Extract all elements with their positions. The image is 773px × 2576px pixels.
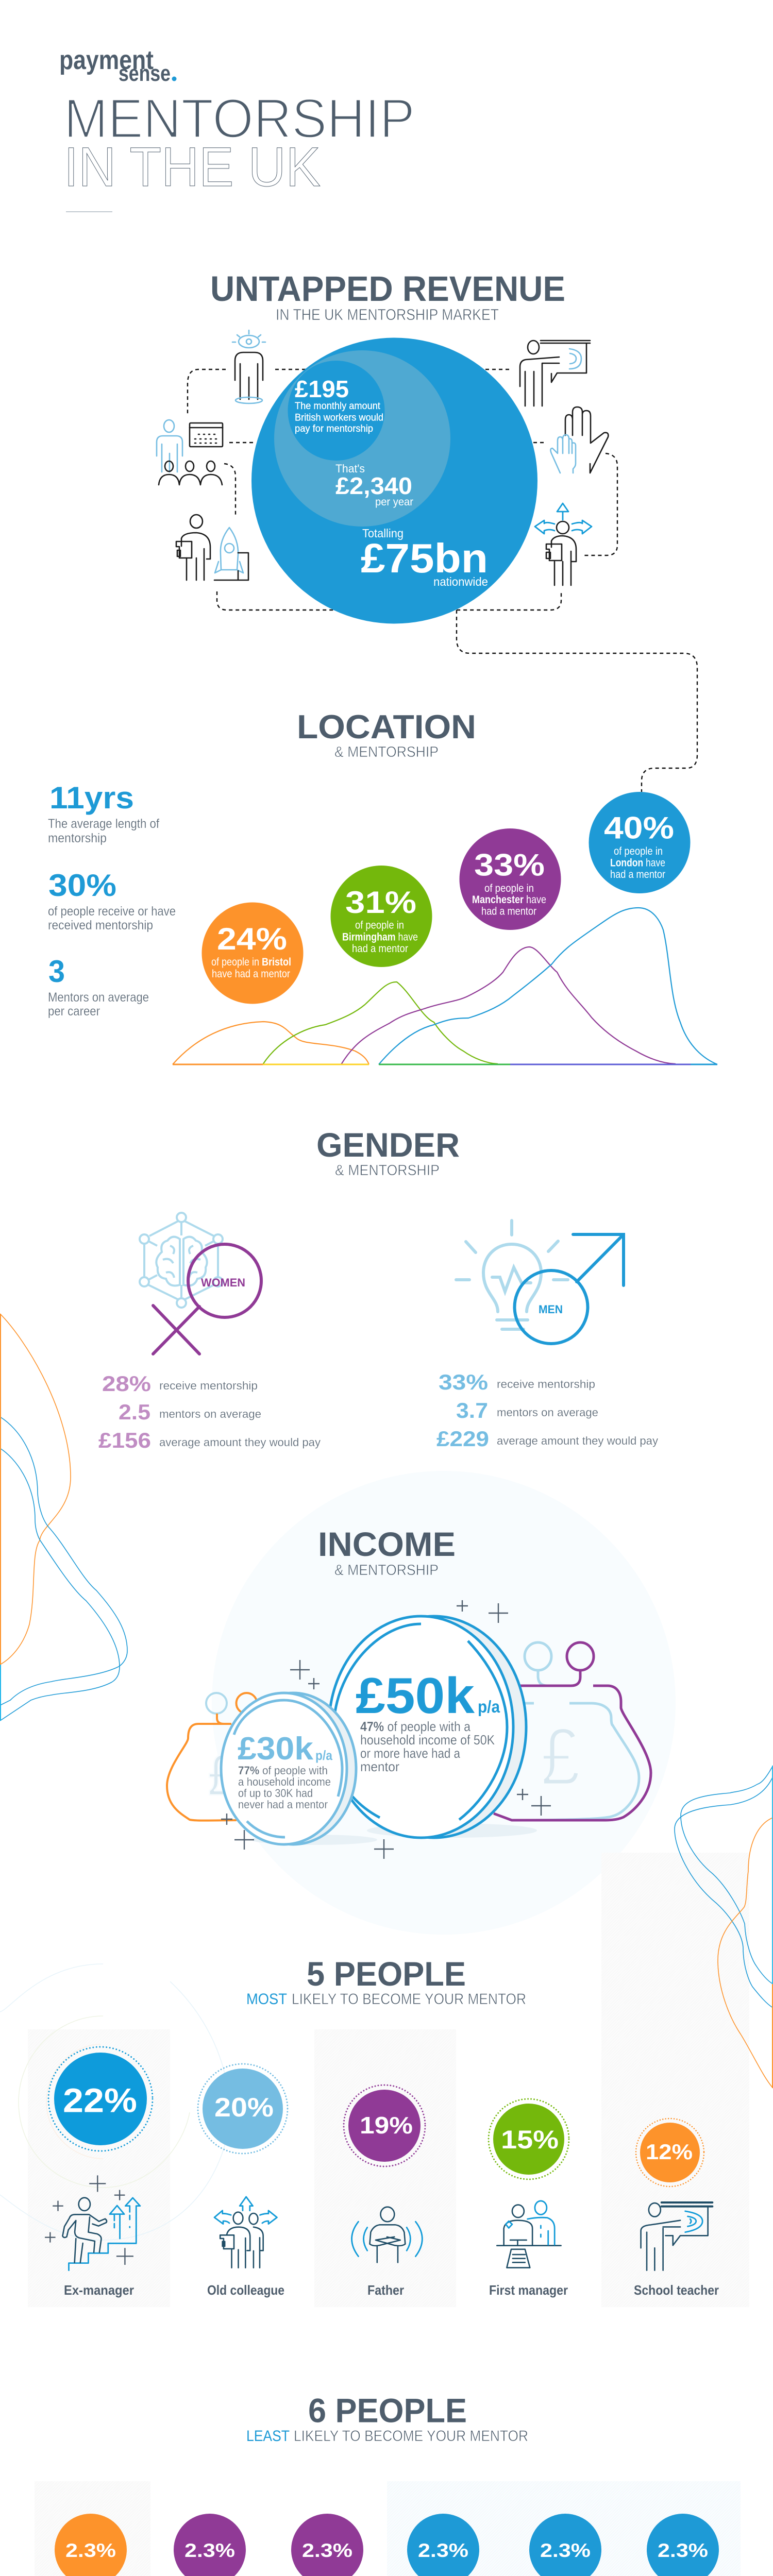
coin: £30k: a household income [238, 1775, 331, 1788]
bubble row: 2.3% [55, 2514, 719, 2576]
stat labels: men: mentors on average [497, 1406, 598, 1419]
heading: 6 people: 6 PEOPLE [308, 2392, 467, 2430]
stat: 11yrs: The average length of [48, 817, 159, 831]
£75bn text: nationwide [433, 575, 488, 588]
icon: old colleague [214, 2197, 277, 2268]
£195 text [295, 376, 383, 434]
bubble: manchester [460, 828, 561, 930]
bubble: manchester: 33% [474, 848, 545, 882]
title: IN THE UK [64, 135, 321, 198]
stat: 11yrs: mentorship [48, 831, 107, 845]
bubble: bristol [202, 903, 303, 1004]
label row: 5 people: Ex-manager [64, 2282, 134, 2298]
icon: first manager [497, 2201, 561, 2268]
heading: location: & MENTORSHIP [334, 744, 439, 760]
label row: 5 people: First manager [489, 2282, 568, 2298]
label: women: WOMEN [201, 1276, 245, 1289]
icon: father with arms crossed [352, 2207, 422, 2262]
heading: untapped revenue [210, 269, 565, 324]
heading: location: LOCATION [297, 708, 476, 745]
bubble row: 2.3%: 2.3% [65, 2540, 116, 2561]
£2,340 text: per year [375, 496, 413, 508]
stat: 30%: 30% [48, 868, 116, 903]
label row: 5 people: Father [367, 2282, 404, 2298]
icon: person with rocket [176, 515, 248, 580]
stat: 11yrs: 11yrs [49, 781, 134, 815]
sparkles: income [221, 1600, 551, 1859]
background: income circle [212, 1471, 676, 1935]
heading: income: INCOME [318, 1525, 456, 1563]
stat labels: men: receive mentorship [497, 1378, 595, 1391]
illustration: purple purse [494, 1642, 651, 1820]
bubble: 19%: 19% [360, 2112, 413, 2139]
heading: 5 people: LIKELY TO BECOME YOUR MENTOR [292, 1991, 526, 2008]
stat labels: women: average amount they would pay [159, 1436, 321, 1449]
coin: £30k: of up to 30K had [238, 1787, 313, 1800]
chart: location curves [173, 908, 717, 1064]
background panel: ex-manager column [28, 2029, 170, 2307]
coin: £50k: 47% of people with a [360, 1719, 470, 1734]
title: MENTORSHIP [64, 87, 415, 149]
bubble: manchester: had a mentor [481, 906, 536, 917]
icon: person with calendar and group [157, 420, 223, 485]
stat: 3 mentors: Mentors on average [48, 990, 149, 1005]
bubble row: 2.3%: 2.3% [540, 2540, 591, 2561]
heading: 5 people [246, 1955, 526, 2008]
£195 text: The monthly amount [295, 401, 381, 412]
coin: £50k: household income of 50K [360, 1732, 495, 1748]
label row: 5 people [64, 2282, 719, 2298]
bubble: 15%: 15% [501, 2125, 559, 2154]
background panel: stepmother to coach [387, 2481, 741, 2576]
£195 text: £195 [295, 376, 349, 402]
£75bn text: £75bn [361, 535, 488, 581]
bubble: 22%: 22% [63, 2081, 137, 2120]
bubble: manchester: Manchester have [472, 894, 546, 906]
stat labels: men [497, 1378, 658, 1447]
label row: 5 people: Old colleague [207, 2282, 284, 2298]
stats: men: £229 [436, 1427, 489, 1451]
bubble: 12% [636, 2119, 704, 2187]
bubble row: 2.3%: 2.3% [418, 2540, 468, 2561]
dashed connectors [188, 369, 697, 792]
stat: 3 mentors [48, 954, 149, 1019]
illustration: orange purse: £ [208, 1743, 236, 1807]
icon: eye person [232, 330, 265, 403]
stats: women [98, 1371, 151, 1452]
heading: 5 people: MOST [246, 1991, 287, 2008]
bubble: 12%: 12% [646, 2140, 693, 2164]
icon: light bulb [456, 1221, 568, 1329]
bubble: london: 40% [604, 811, 674, 845]
bubble: birmingham: had a mentor [352, 943, 408, 955]
stat: 30% [48, 868, 176, 933]
bubble: bristol: of people in Bristol [211, 956, 291, 968]
icon: venus symbol [153, 1244, 261, 1354]
bubble row: 2.3%: 2.3% [658, 2540, 708, 2561]
icon: raised hands [550, 407, 608, 473]
stat: 11yrs [48, 781, 159, 845]
bubble: 20% [198, 2064, 288, 2154]
stats: men: 33% [439, 1370, 488, 1394]
stats: men: 3.7 [456, 1398, 488, 1422]
£195 text: pay for mentorship [295, 423, 373, 434]
bubble: birmingham: 31% [345, 885, 416, 920]
illustration: purple purse: £ [541, 1711, 580, 1802]
coin: £30k [221, 1693, 356, 1844]
coin: £30k: £30k [238, 1731, 314, 1767]
coin: £50k: mentor [360, 1759, 399, 1774]
£2,340 text: That's [335, 462, 365, 475]
revenue circles [251, 338, 537, 623]
coin: £30k: p/a [315, 1748, 332, 1763]
heading: income: & MENTORSHIP [334, 1562, 439, 1579]
bubble row: 2.3%: 2.3% [302, 2540, 352, 2561]
icon: mars symbol [514, 1234, 624, 1344]
bubble: birmingham: Birmingham have [342, 931, 418, 943]
title [64, 87, 415, 198]
heading: 6 people: LIKELY TO BECOME YOUR MENTOR [294, 2428, 528, 2445]
logo: sense [119, 61, 171, 86]
coin: £30k: 77% of people with [238, 1764, 328, 1777]
divider [66, 211, 112, 212]
bubble: bristol: 24% [217, 922, 287, 956]
heading: untapped revenue: IN THE UK MENTORSHIP MARKET [276, 306, 499, 324]
bubble: london: had a mentor [610, 869, 665, 880]
£75bn text: Totalling [362, 527, 404, 540]
icon: person with arrows [535, 503, 592, 585]
stat: 3 mentors: 3 [48, 954, 65, 989]
heading: untapped revenue: UNTAPPED REVENUE [210, 269, 565, 309]
stat labels: women: receive mentorship [159, 1379, 258, 1392]
stats: women: £156 [98, 1428, 151, 1452]
heading: gender: & MENTORSHIP [335, 1162, 440, 1179]
bubble: 15% [489, 2099, 569, 2179]
stats: women: 2.5 [119, 1400, 150, 1424]
coin: £30k: never had a mentor [238, 1798, 328, 1811]
bubble: bristol: have had a mentor [212, 968, 290, 980]
icon: ex-manager climbing stairs [45, 2175, 140, 2270]
£195 text: British workers would [295, 412, 383, 423]
heading: 5 people: 5 PEOPLE [307, 1955, 466, 1993]
illustration: orange purse [167, 1693, 257, 1821]
bubble: 19% [344, 2085, 425, 2166]
shadow: small coin [251, 1835, 377, 1845]
bubble: 20%: 20% [214, 2093, 274, 2123]
stat: 30%: of people receive or have [48, 904, 176, 919]
stat: 3 mentors: per career [48, 1004, 100, 1019]
stat: 30%: received mentorship [48, 918, 153, 933]
coin: £50k [329, 1616, 526, 1838]
shadow: large coin [367, 1823, 537, 1838]
logo [59, 45, 176, 86]
stats: men [436, 1370, 489, 1451]
stats: women: 28% [102, 1371, 151, 1396]
heading: 6 people [246, 2392, 528, 2445]
bubble: london: of people in [614, 845, 663, 857]
decorative rings [0, 1964, 229, 2240]
coin: £50k: p/a [478, 1697, 500, 1716]
bubble: london [589, 792, 691, 893]
£2,340 text: £2,340 [335, 472, 412, 499]
decorative swirl: left [0, 1314, 127, 1721]
decorative swirl: right [675, 1766, 773, 2088]
icon: network brain [140, 1213, 223, 1308]
bubble: birmingham: of people in [355, 919, 404, 931]
£75bn text [361, 527, 488, 588]
heading: 6 people: LEAST [246, 2428, 290, 2445]
bubble row: 2.3%: 2.3% [184, 2540, 235, 2561]
background panel: father-in-law [35, 2481, 150, 2576]
logo: payment [59, 45, 154, 75]
icon: presenter with board [520, 341, 590, 406]
bubble: 22% [48, 2047, 153, 2151]
heading: gender: GENDER [316, 1126, 460, 1164]
£2,340 text [335, 462, 413, 508]
stat labels: women [159, 1379, 321, 1449]
bubble: london: London have [610, 857, 665, 869]
icon: school teacher [641, 2202, 712, 2270]
heading: location [297, 708, 476, 760]
stat labels: men: average amount they would pay [497, 1434, 658, 1447]
bubble: birmingham [331, 866, 432, 967]
background panel: right column [601, 1853, 749, 2307]
stat labels: women: mentors on average [159, 1408, 261, 1420]
label: men: MEN [539, 1303, 563, 1316]
coin: £50k: or more have had a [360, 1745, 460, 1761]
bubble: manchester: of people in [484, 883, 534, 894]
label row: 5 people: School teacher [634, 2282, 719, 2298]
background panel: father column [314, 2029, 456, 2307]
coin: £50k: £50k [356, 1667, 475, 1724]
